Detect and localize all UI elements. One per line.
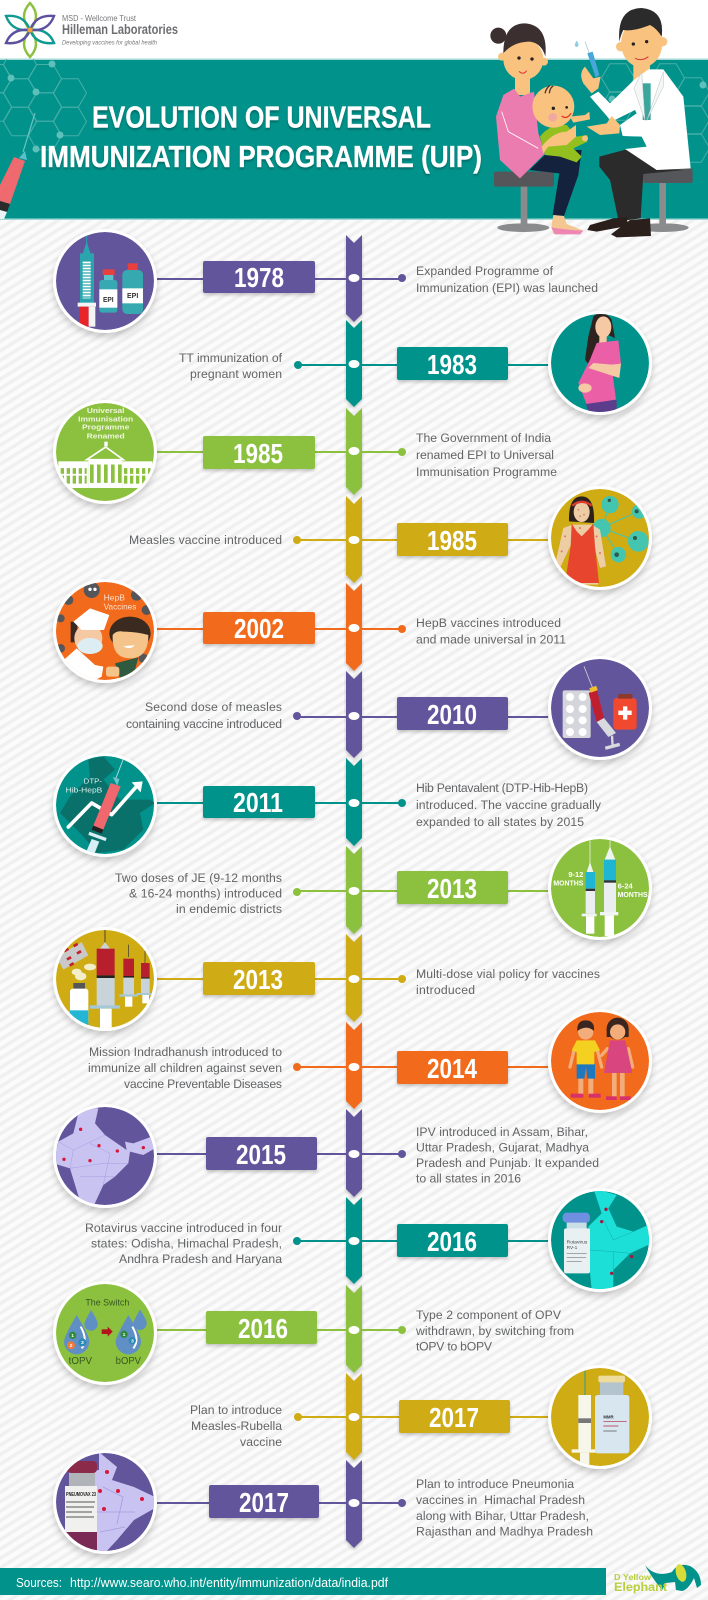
text 2011: expanded to all states by 2015: [416, 815, 584, 829]
entry: 2015: [53, 1104, 599, 1208]
year 2014: [397, 1051, 508, 1084]
year 2017 left: 2017: [239, 1487, 289, 1518]
text 2016 left: [415, 1308, 574, 1354]
entry: 2010: [126, 656, 652, 760]
text 1985 left: renamed EPI to Universal: [416, 448, 554, 462]
entry: 2014: [88, 1009, 652, 1113]
year 2016 right: 2016: [427, 1226, 477, 1257]
icon: girl with measles: [548, 486, 652, 590]
year 2010: [397, 697, 508, 730]
logo: D Yellow Elephant: [614, 1563, 701, 1594]
text 2014: Mission Indradhanush introduced to: [89, 1045, 282, 1059]
year 2011: 2011: [233, 787, 283, 818]
icon: renamed programme building: Renamed: [87, 433, 125, 440]
text 1978: Expanded Programme of: [416, 264, 554, 278]
icon: two JE syringes: 9-12: [568, 870, 583, 879]
year 1978: 1978: [234, 262, 284, 293]
entry: 1978: [53, 229, 598, 333]
entry: 2017 measles-rubella: [190, 1365, 652, 1469]
icon: MMR vial and syringe: [548, 1365, 652, 1469]
text 2010: [126, 700, 282, 731]
text 2011: introduced. The vaccine gradually: [416, 798, 602, 812]
icon: pneumonia vial and map: [53, 1450, 157, 1554]
icon: map of IPV states: [53, 1104, 157, 1208]
entry: 2013 JE: [115, 836, 652, 940]
connector 2014: [293, 1063, 548, 1071]
entry: 1983: [179, 311, 652, 416]
text 2017 left: [416, 1477, 593, 1538]
year 1983: [397, 347, 508, 380]
text 1978: Immunization (EPI) was launched: [416, 281, 598, 295]
icon: the switch from tOPV to bOPV: tOPV: [69, 1356, 92, 1367]
title: [40, 100, 482, 174]
year 2013 left: 2013: [233, 964, 283, 995]
text 2015: [416, 1125, 599, 1186]
icon: MMR vial and syringe: MMR: [603, 1414, 615, 1419]
year 2015: [206, 1137, 317, 1170]
icon: the switch from tOPV to bOPV: 3: [81, 1340, 84, 1346]
year 2017 right: [399, 1400, 510, 1433]
header band: [0, 50, 708, 220]
connector 2016 right: [293, 1237, 548, 1245]
icon: rotavirus vial and map: Rotavirus: [567, 1239, 587, 1244]
logo text: MSD - Wellcome Trust: [62, 14, 137, 23]
icon: child receiving HepB vaccine: Vaccines: [104, 601, 136, 611]
year 1985 left: [203, 436, 315, 469]
text 2013 right: Two doses of JE (9-12 months: [115, 871, 282, 885]
entry: 1985 measles: [129, 486, 652, 590]
icon: two JE syringes: 6-24: [618, 882, 634, 891]
connector 2002: [157, 624, 406, 633]
text 1985 right: Measles vaccine introduced: [129, 533, 282, 547]
icon: syringe in header: [0, 113, 35, 219]
connector 2011: [157, 799, 406, 807]
logo: Hilleman Laboratories: Developing vaccines for global health: [62, 40, 157, 46]
year 2015: 2015: [236, 1139, 286, 1170]
text 2014: immunize all children against seven: [88, 1061, 282, 1075]
text 2016 right: [85, 1221, 282, 1266]
logo mark: [6, 3, 54, 57]
logo: D Yellow Elephant: Elephant: [614, 1580, 667, 1594]
icon: pregnant woman: [548, 311, 652, 416]
text 2017 left: Rajasthan and Madhya Pradesh: [416, 1524, 593, 1538]
text 2014: vaccine Preventable Diseases: [124, 1077, 282, 1091]
text 2015: to all states in 2016: [416, 1172, 521, 1186]
year 2016 right: [397, 1224, 508, 1257]
doctor: [575, 8, 691, 237]
icon: pneumonia vial and map: PNEUMOVAX 23: [66, 1492, 96, 1498]
year 2013 right: [397, 871, 508, 904]
text 1983: TT immunization of: [179, 351, 283, 365]
icon: tablets, syringe and bottle: [548, 656, 652, 760]
text 2016 right: Rotavirus vaccine introduced in four: [85, 1221, 282, 1235]
year 2017 left: [209, 1485, 319, 1518]
text 1985 left: The Government of India: [416, 431, 551, 445]
entry: 2013 multi-dose: [53, 927, 600, 1032]
year 2011: [203, 786, 315, 818]
icon: Hib-HepB syringe and rising arrow: [53, 753, 157, 857]
icon: rotavirus vial and map: [548, 1188, 652, 1292]
entry: 2016 rotavirus: [85, 1188, 652, 1292]
year 1983: 1983: [427, 349, 477, 380]
illustration: mother, baby and doctor: [490, 8, 693, 237]
text 2017 right: [190, 1403, 282, 1449]
text 2013 right: in endemic districts: [176, 902, 282, 916]
year 2013 left: [203, 962, 315, 995]
connector 1985 left: [157, 447, 406, 456]
connector 1983: [294, 360, 548, 369]
icon: child receiving HepB vaccine: [53, 579, 157, 687]
title: EVOLUTION OF UNIVERSAL: [92, 100, 431, 134]
icon: the switch from tOPV to bOPV: The Switch: [85, 1298, 129, 1308]
text 2013 left: [416, 967, 600, 997]
icon: renamed programme building: [53, 400, 157, 504]
baby: [532, 85, 590, 162]
text 2017 right: Measles-Rubella: [191, 1419, 282, 1433]
year 2016 left: [206, 1311, 317, 1344]
icon: Hib-HepB syringe and rising arrow: Hib-HepB: [66, 786, 102, 795]
text 2013 right: & 16-24 months) introduced: [129, 886, 282, 900]
text 2017 right: vaccine: [240, 1435, 282, 1449]
text 2013 left: introduced: [416, 983, 475, 997]
text 2016 right: states: Odisha, Himachal Pradesh,: [91, 1236, 282, 1250]
text 2013 left: Multi-dose vial policy for vaccines: [416, 967, 600, 981]
icon: two JE syringes: MONTHS: [553, 878, 583, 887]
text 1978: [416, 264, 598, 295]
icon: the switch from tOPV to bOPV: 2: [70, 1343, 73, 1349]
icon: Hib-HepB syringe and rising arrow: DTP-: [84, 777, 102, 786]
text 2011: Hib Pentavalent (DTP-Hib-HepB): [416, 781, 588, 795]
icon: two JE syringes: [548, 836, 652, 940]
year 2010: 2010: [427, 699, 477, 730]
year 1985 right: [397, 523, 508, 556]
text 1983: [179, 351, 283, 381]
text 2016 left: withdrawn, by switching from: [415, 1324, 574, 1338]
year 1978: [203, 261, 315, 293]
text 2010: Second dose of measles: [145, 700, 282, 714]
text 2015: Pradesh and Punjab. It expanded: [416, 1156, 599, 1170]
connector 2015: [157, 1150, 406, 1158]
text 2002: and made universal in 2011: [416, 632, 566, 646]
connector 2013 left: [157, 975, 406, 983]
connector 1978: [157, 274, 406, 282]
icon: the switch from tOPV to bOPV: [53, 1281, 157, 1385]
year 1985 right: 1985: [427, 525, 477, 556]
entry: 2011: [53, 753, 602, 857]
icon: multi-dose vials and syringes: [53, 927, 157, 1032]
icon: renamed programme building: Immunisation: [78, 416, 133, 423]
icon: rotavirus vial and map: RV-1: [567, 1245, 578, 1250]
connector 2016 left: [157, 1326, 406, 1334]
connector 1985 right: [293, 536, 548, 544]
text 2017 left: Plan to introduce Pneumonia: [416, 1477, 574, 1491]
text 2016 right: Andhra Pradesh and Haryana: [119, 1252, 282, 1266]
title: IMMUNIZATION PROGRAMME (UIP): [40, 139, 482, 174]
year 2002: 2002: [234, 613, 284, 644]
icon: two JE syringes: MONTHS: [618, 890, 648, 899]
text 1983: pregnant women: [190, 367, 282, 381]
entry: 2017 pneumonia: [53, 1450, 593, 1554]
doctor's stool: [637, 168, 693, 232]
text 2002: [416, 616, 566, 646]
text 2017 right: Plan to introduce: [190, 1403, 282, 1417]
text 2013 right: [115, 871, 282, 916]
icon: renamed programme building: Universal: [87, 408, 125, 415]
text 2016 left: Type 2 component of OPV: [416, 1308, 562, 1322]
logo: Hilleman Laboratories: [6, 3, 178, 57]
footer sources bar: http://www.searo.who.int/entity/immunization/data/india.pdf: [70, 1576, 389, 1590]
icon: the switch from tOPV to bOPV: 1: [71, 1333, 74, 1339]
icon: child receiving HepB vaccine: HepB: [104, 593, 125, 603]
year 2016 left: 2016: [238, 1313, 288, 1344]
entry: 2002: [53, 579, 566, 687]
connector 2017 left: [157, 1499, 406, 1507]
year 2014: 2014: [427, 1053, 477, 1084]
text 2011: [416, 781, 602, 829]
icon: renamed programme building: Programme: [82, 425, 129, 432]
text 2010: containing vaccine introduced: [126, 717, 282, 731]
entry: 1985 renamed: [53, 400, 557, 504]
top white strip: [0, 0, 708, 59]
connector 2010: [293, 712, 548, 720]
icon: syringe and EPI vials: [53, 229, 157, 333]
text 2015: IPV introduced in Assam, Bihar,: [416, 1125, 588, 1139]
logo: Hilleman Laboratories: Hilleman Laboratories: [62, 21, 178, 37]
year 2013 right: 2013: [427, 873, 477, 904]
year 2017 right: 2017: [429, 1402, 479, 1433]
text 2016 left: tOPV to bOPV: [416, 1340, 493, 1354]
icon: syringe and EPI vials: EPI: [103, 297, 114, 304]
timeline spine: [346, 235, 362, 1548]
icon: syringe and EPI vials: EPI: [127, 293, 138, 300]
icon: boy and girl: [548, 1009, 652, 1113]
text 2002: HepB vaccines introduced: [416, 616, 561, 630]
logo: D Yellow Elephant: D Yellow: [614, 1572, 651, 1582]
text 2014: [88, 1045, 282, 1091]
footer sources bar: [0, 1568, 606, 1595]
text 2015: Uttar Pradesh, Gujarat, Madhya: [416, 1140, 589, 1154]
connector 2013 right: [293, 887, 548, 896]
year 2002: [203, 612, 315, 644]
icon: the switch from tOPV to bOPV: bOPV: [116, 1356, 141, 1367]
mother's stool: [494, 172, 554, 232]
text 1985 left: [416, 431, 557, 479]
text 2017 left: vaccines in Himachal Pradesh: [416, 1493, 585, 1507]
text 2017 left: along with Bihar, Uttar Pradesh,: [416, 1509, 589, 1523]
footer sources bar: Sources:: [16, 1576, 62, 1590]
icon: the switch from tOPV to bOPV: 3: [131, 1338, 134, 1344]
year 1985 left: 1985: [233, 438, 283, 469]
mother: [490, 23, 583, 234]
text 1985 left: Immunisation Programme: [416, 465, 557, 479]
entry: 2016 OPV switch: [53, 1281, 574, 1385]
connector 2017 right: [294, 1413, 548, 1421]
icon: the switch from tOPV to bOPV: 1: [123, 1332, 126, 1338]
